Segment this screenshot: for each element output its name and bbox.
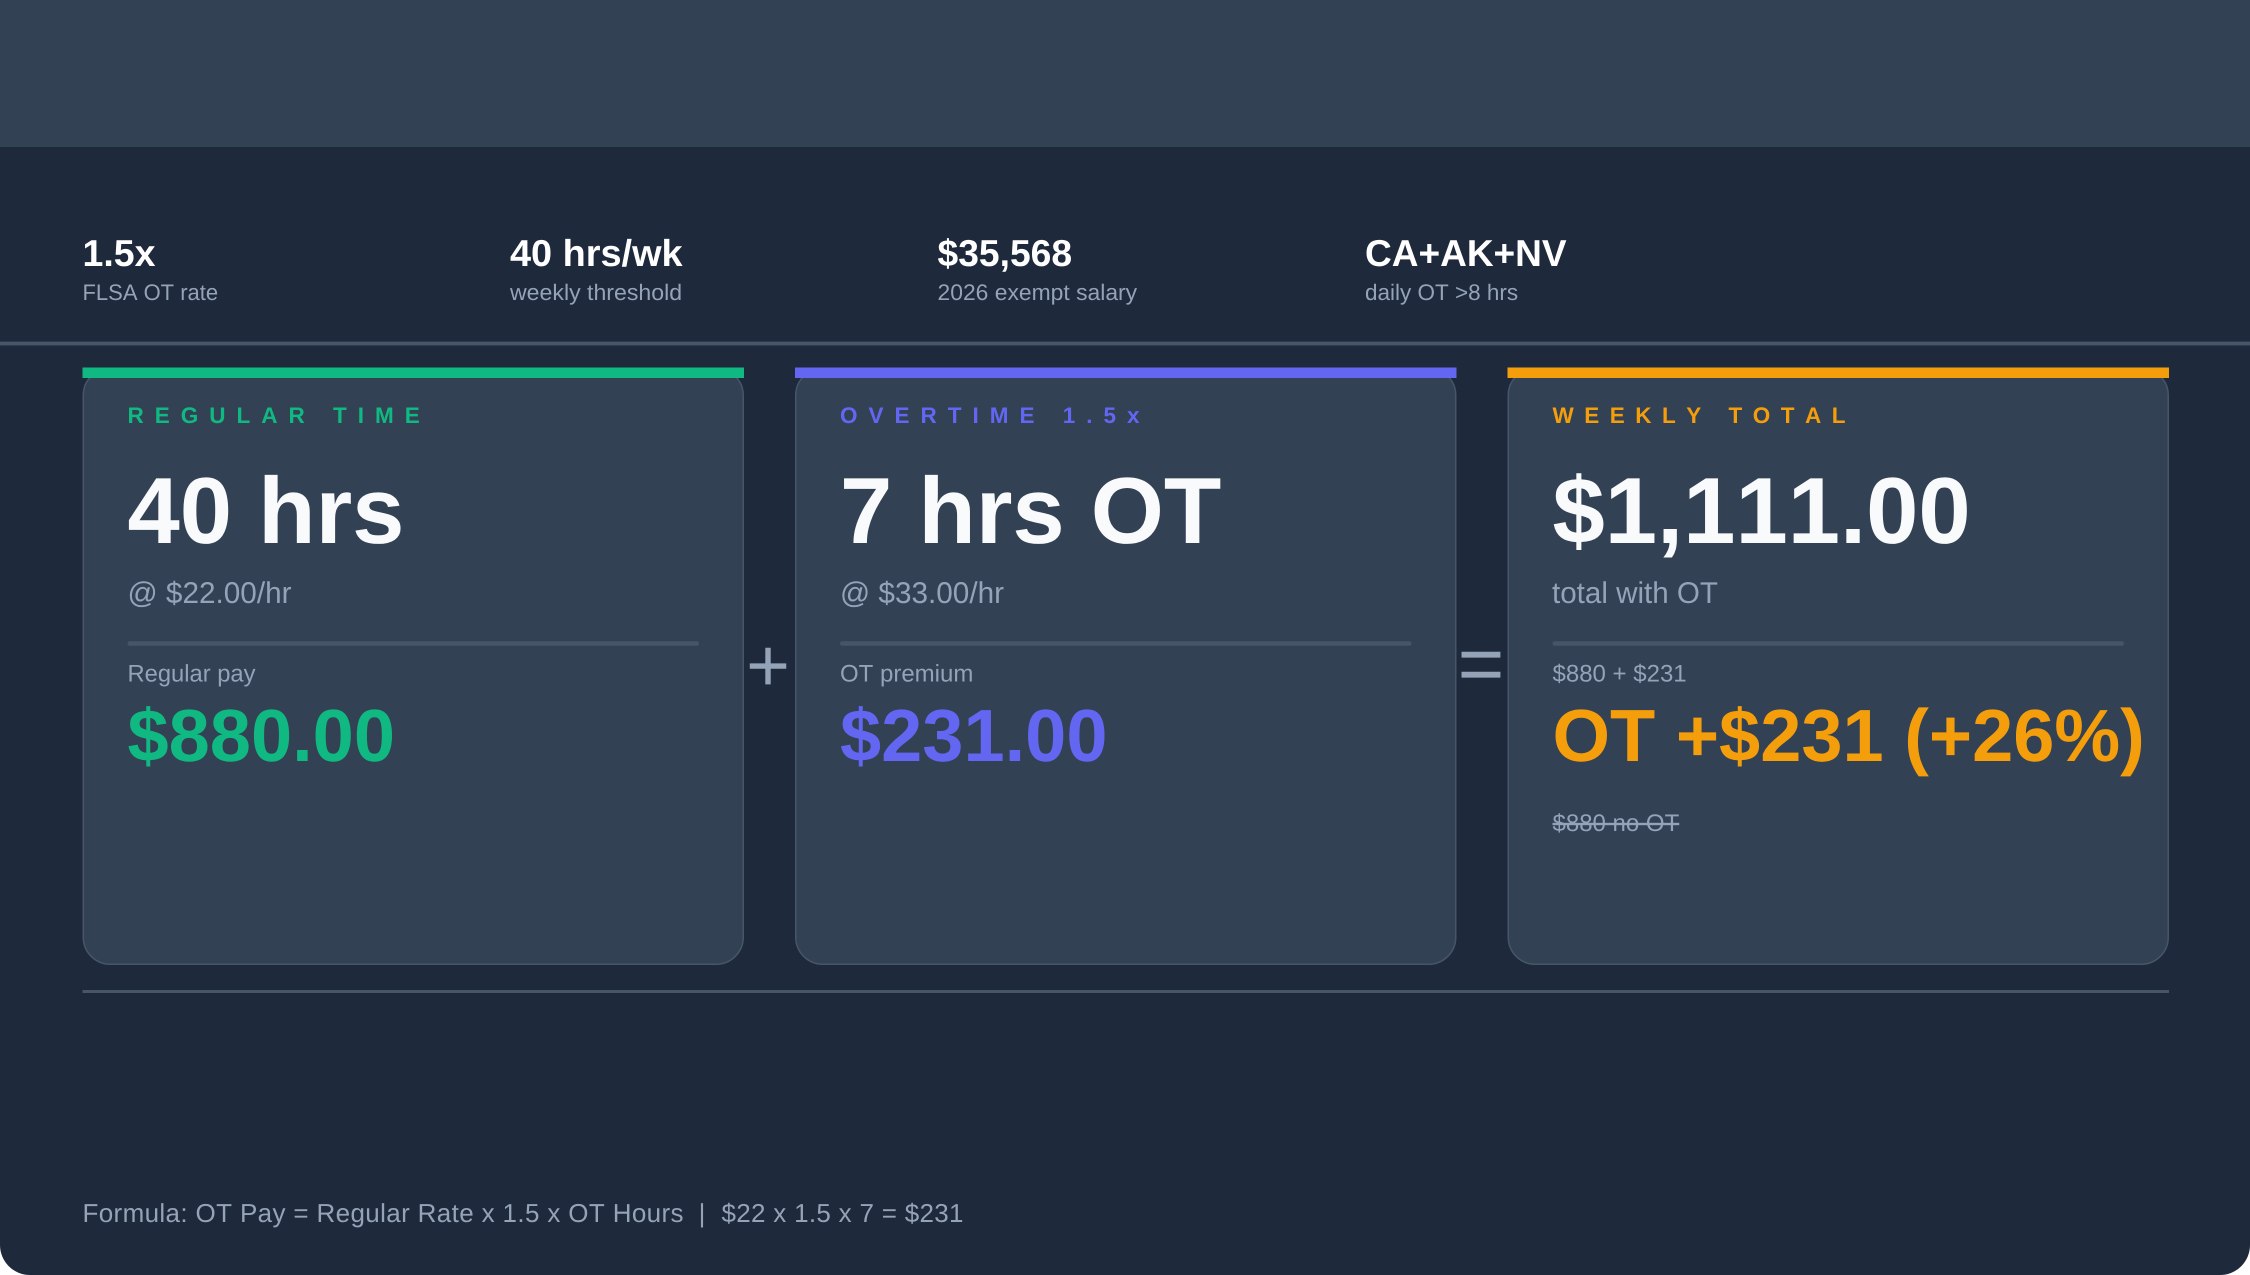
panel: weekly total: $880 no OT — [1552, 810, 1680, 837]
formula footnote: | — [699, 1198, 705, 1228]
panel: regular time: @ $22.00/hr — [128, 577, 292, 610]
stat: weekly threshold: weekly threshold — [509, 280, 682, 305]
panel: regular time: Regular pay — [128, 660, 256, 688]
stat: daily OT states: CA+AK+NV — [1365, 232, 1567, 274]
panel: overtime — [795, 368, 1456, 964]
panel: regular time: $880.00 — [128, 694, 395, 777]
stat: weekly threshold: 40 hrs/wk — [510, 232, 683, 274]
panel: overtime: $231.00 — [840, 694, 1108, 777]
panel: weekly total: OT +$231 (+26%) — [1552, 694, 2145, 777]
formula footnote: $22 x 1.5 x 7 = $231 — [722, 1198, 964, 1228]
stat: exempt salary: $35,568 — [938, 232, 1072, 274]
panel: overtime: @ $33.00/hr — [840, 577, 1004, 610]
stat: FLSA OT rate — [82, 232, 218, 305]
panel: weekly total — [1508, 368, 2169, 964]
panel: weekly total: total with OT — [1552, 577, 1718, 610]
formula footnote — [82, 1198, 964, 1228]
formula footnote: Formula: OT Pay = Regular Rate x 1.5 x OT Hours — [82, 1198, 684, 1228]
stat: daily OT states: daily OT >8 hrs — [1365, 280, 1518, 305]
stat: daily OT states — [1365, 232, 1567, 305]
stat: FLSA OT rate: FLSA OT rate — [82, 280, 218, 305]
stat: FLSA OT rate: 1.5x — [82, 232, 156, 274]
panel: weekly total: $880 + $231 — [1552, 660, 1687, 688]
panel: overtime: OT premium — [840, 660, 973, 688]
panel: regular time: 40 hrs — [128, 458, 404, 563]
panel: regular time — [82, 368, 744, 964]
panel: overtime: OVERTIME 1.5x — [840, 403, 1151, 428]
operator: equals: = — [1458, 619, 1504, 708]
operator: plus: + — [746, 623, 790, 707]
header band — [0, 0, 2250, 147]
panel: overtime: 7 hrs OT — [840, 458, 1221, 563]
panel: weekly total: WEEKLY TOTAL — [1552, 403, 1856, 428]
stat: exempt salary — [938, 232, 1138, 305]
panel: weekly total: $1,111.00 — [1552, 458, 1971, 563]
stat: weekly threshold — [509, 232, 683, 305]
panel: regular time: REGULAR TIME — [128, 403, 431, 428]
stat: exempt salary: 2026 exempt salary — [938, 280, 1138, 305]
